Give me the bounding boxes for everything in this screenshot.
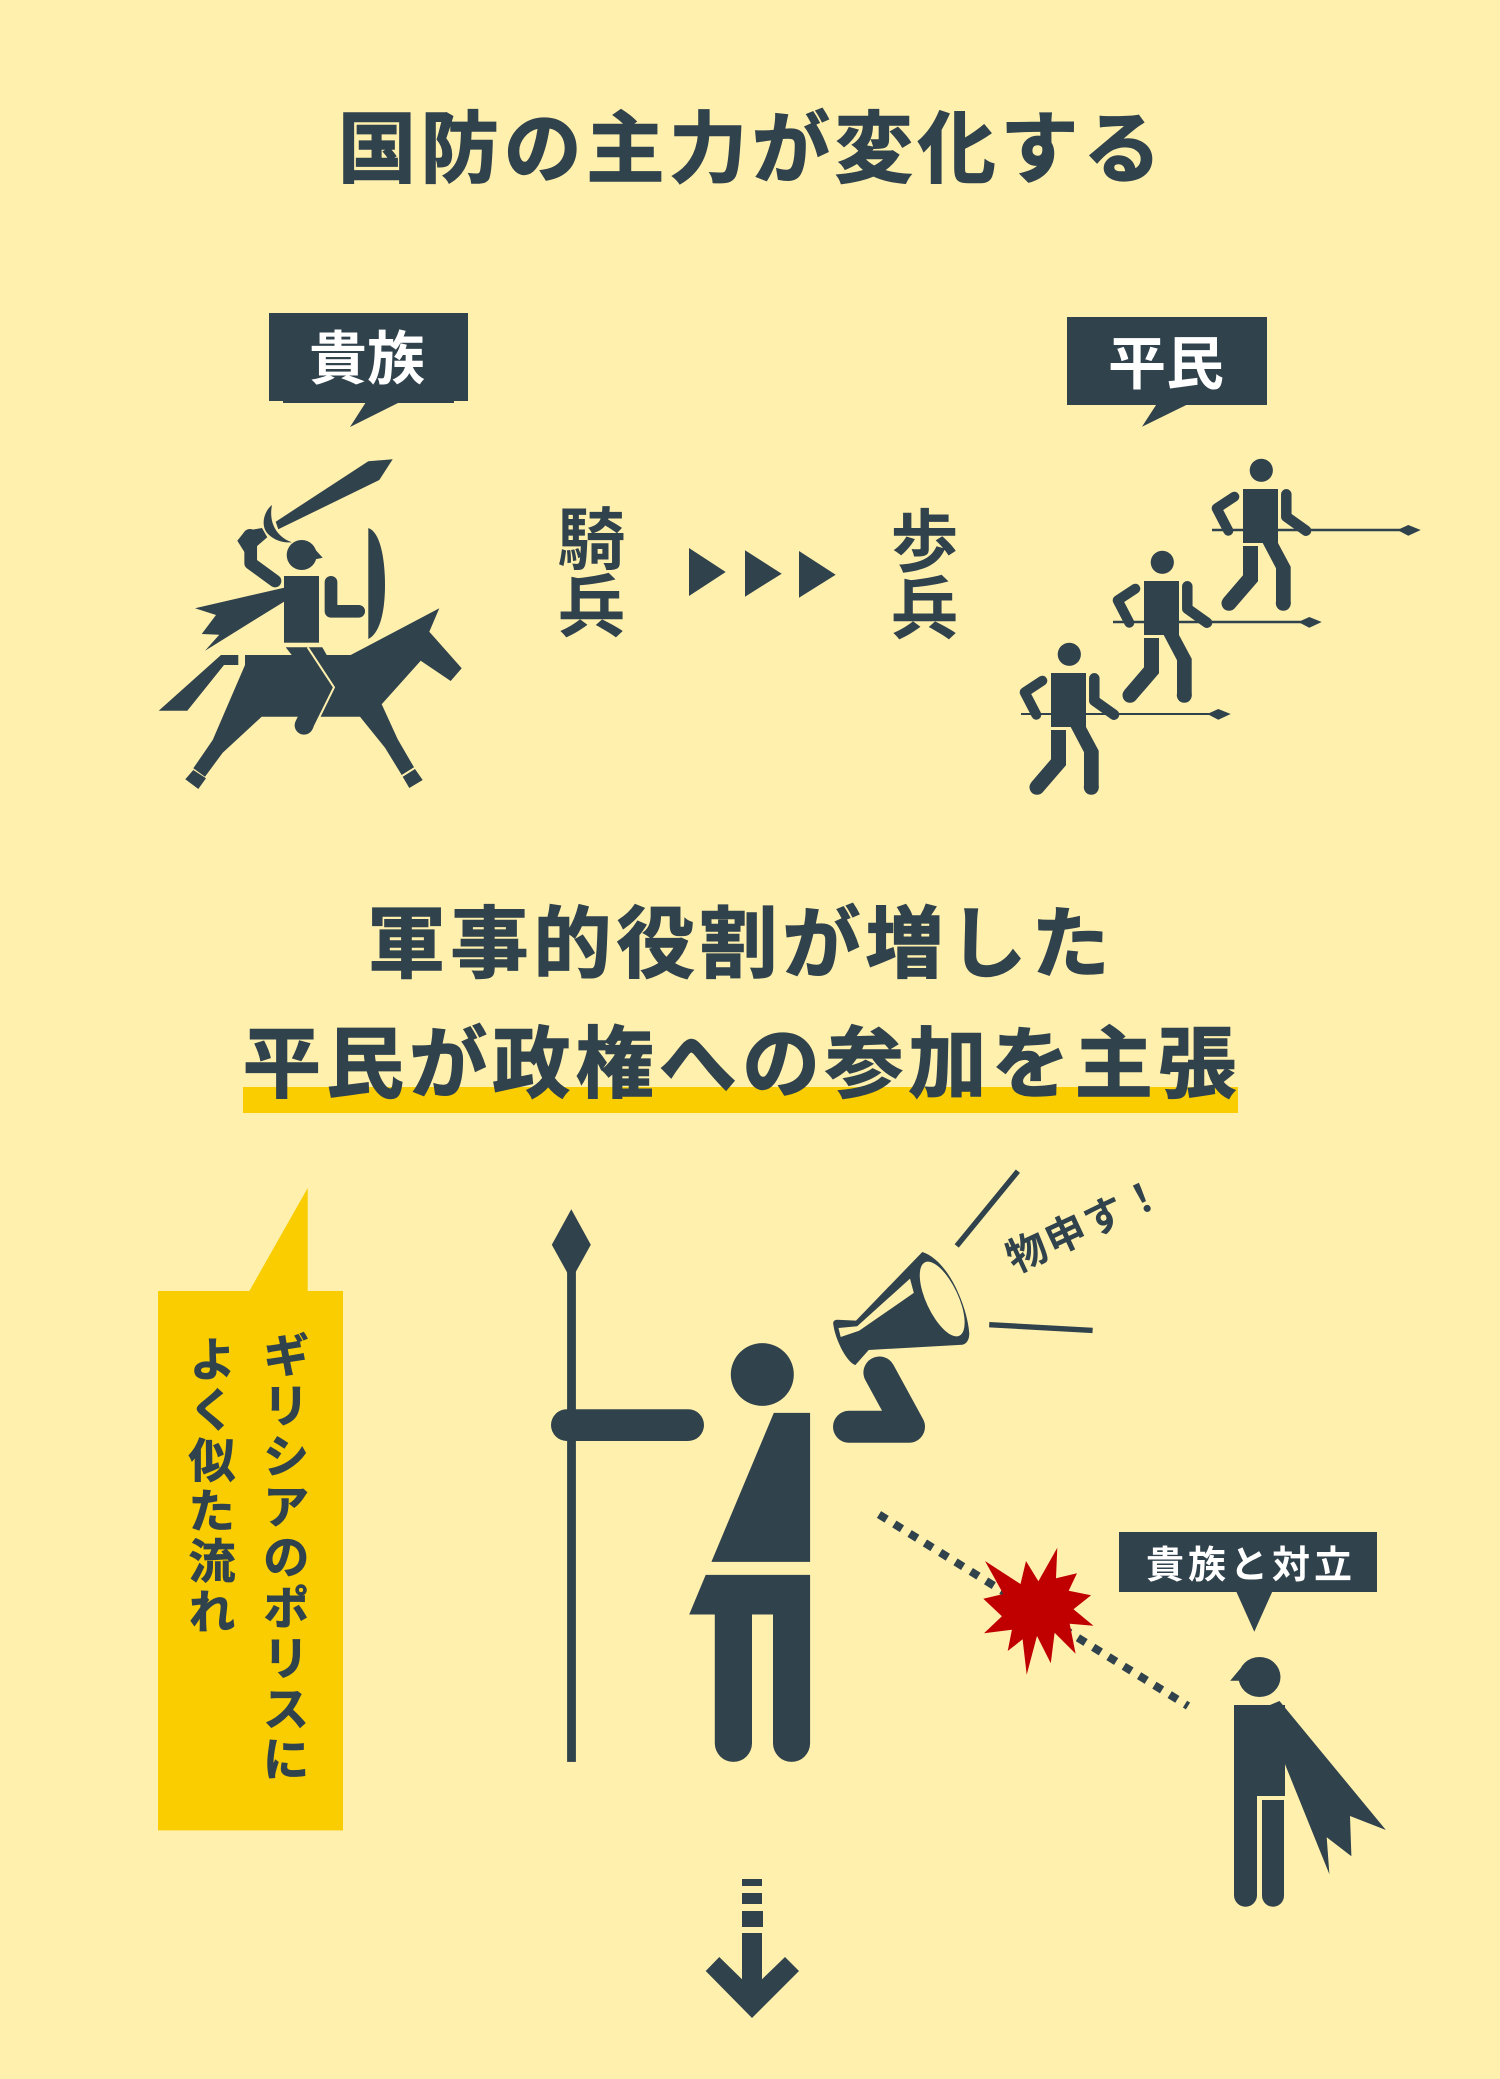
icon: holding arm (551, 1409, 704, 1441)
panel: knight (159, 313, 468, 789)
icon: rider leg (286, 647, 334, 727)
icon: noble second leg (1262, 1800, 1284, 1907)
icon: head (731, 1343, 794, 1406)
callout: commoners (1067, 317, 1267, 427)
highlight bar (243, 1087, 1238, 1113)
callout: noble: 貴族 (309, 327, 425, 392)
label: infantry: 歩 (890, 505, 959, 581)
callout: commoners: 平民 (1108, 332, 1224, 397)
icon: noble cape (1270, 1701, 1386, 1874)
title: 国防の主力が変化する (338, 105, 1166, 193)
label: infantry (890, 505, 959, 648)
icon: horse tail (159, 655, 238, 711)
icon: rider torso (284, 576, 319, 643)
icon: torso (711, 1413, 810, 1562)
heading: commoners claim: 平民が政権への参加を主張 (243, 1020, 1241, 1108)
panel: infantry soldiers (1021, 317, 1421, 795)
callout: greek polis note: ギリシアのポリスに (256, 1331, 308, 1786)
icon: megaphone arm (849, 1372, 909, 1427)
callout: greek polis note: よく似た流れ (182, 1335, 235, 1638)
callout: noble (269, 313, 468, 427)
label: cavalry: 兵 (557, 570, 626, 646)
icon: shield (368, 528, 385, 639)
callout: conflict with nobles (1119, 1532, 1377, 1632)
dotted conflict line (879, 1514, 1188, 1706)
icon: noble body and leg (1234, 1705, 1285, 1907)
panel: noble figure (1230, 1657, 1386, 1907)
icon: sword (264, 459, 393, 542)
icon: soldier middle (1113, 551, 1322, 703)
label: infantry: 兵 (890, 572, 959, 648)
icon: horse body (193, 608, 462, 777)
icon: spear (552, 1209, 591, 1762)
icon: sound lines (957, 1171, 1093, 1330)
text: speak up: 物申す！ (1000, 1170, 1173, 1282)
icon: rider shield arm (331, 582, 359, 611)
icon: cape (195, 588, 284, 651)
label: cavalry (557, 503, 626, 646)
heading: military role: 軍事的役割が増した (367, 900, 1115, 988)
icon: horse hooves (185, 769, 423, 789)
icon: red burst (983, 1548, 1094, 1675)
arrow: down (706, 1879, 799, 2018)
callout: greek polis note (158, 1188, 343, 1830)
arrows: three triangles (689, 548, 836, 598)
icon: rider arm (237, 528, 275, 581)
icon: megaphone (833, 1252, 974, 1365)
icon: soldier bottom (1021, 643, 1231, 795)
panel: commoner with spear (551, 1170, 1173, 1762)
icon: soldier top (1212, 459, 1421, 611)
callout: conflict with nobles: 貴族と対立 (1146, 1545, 1356, 1587)
icon: rider head (287, 540, 323, 570)
icon: noble head (1230, 1657, 1280, 1697)
label: cavalry: 騎 (557, 503, 626, 579)
icon: skirt and legs (689, 1575, 810, 1762)
